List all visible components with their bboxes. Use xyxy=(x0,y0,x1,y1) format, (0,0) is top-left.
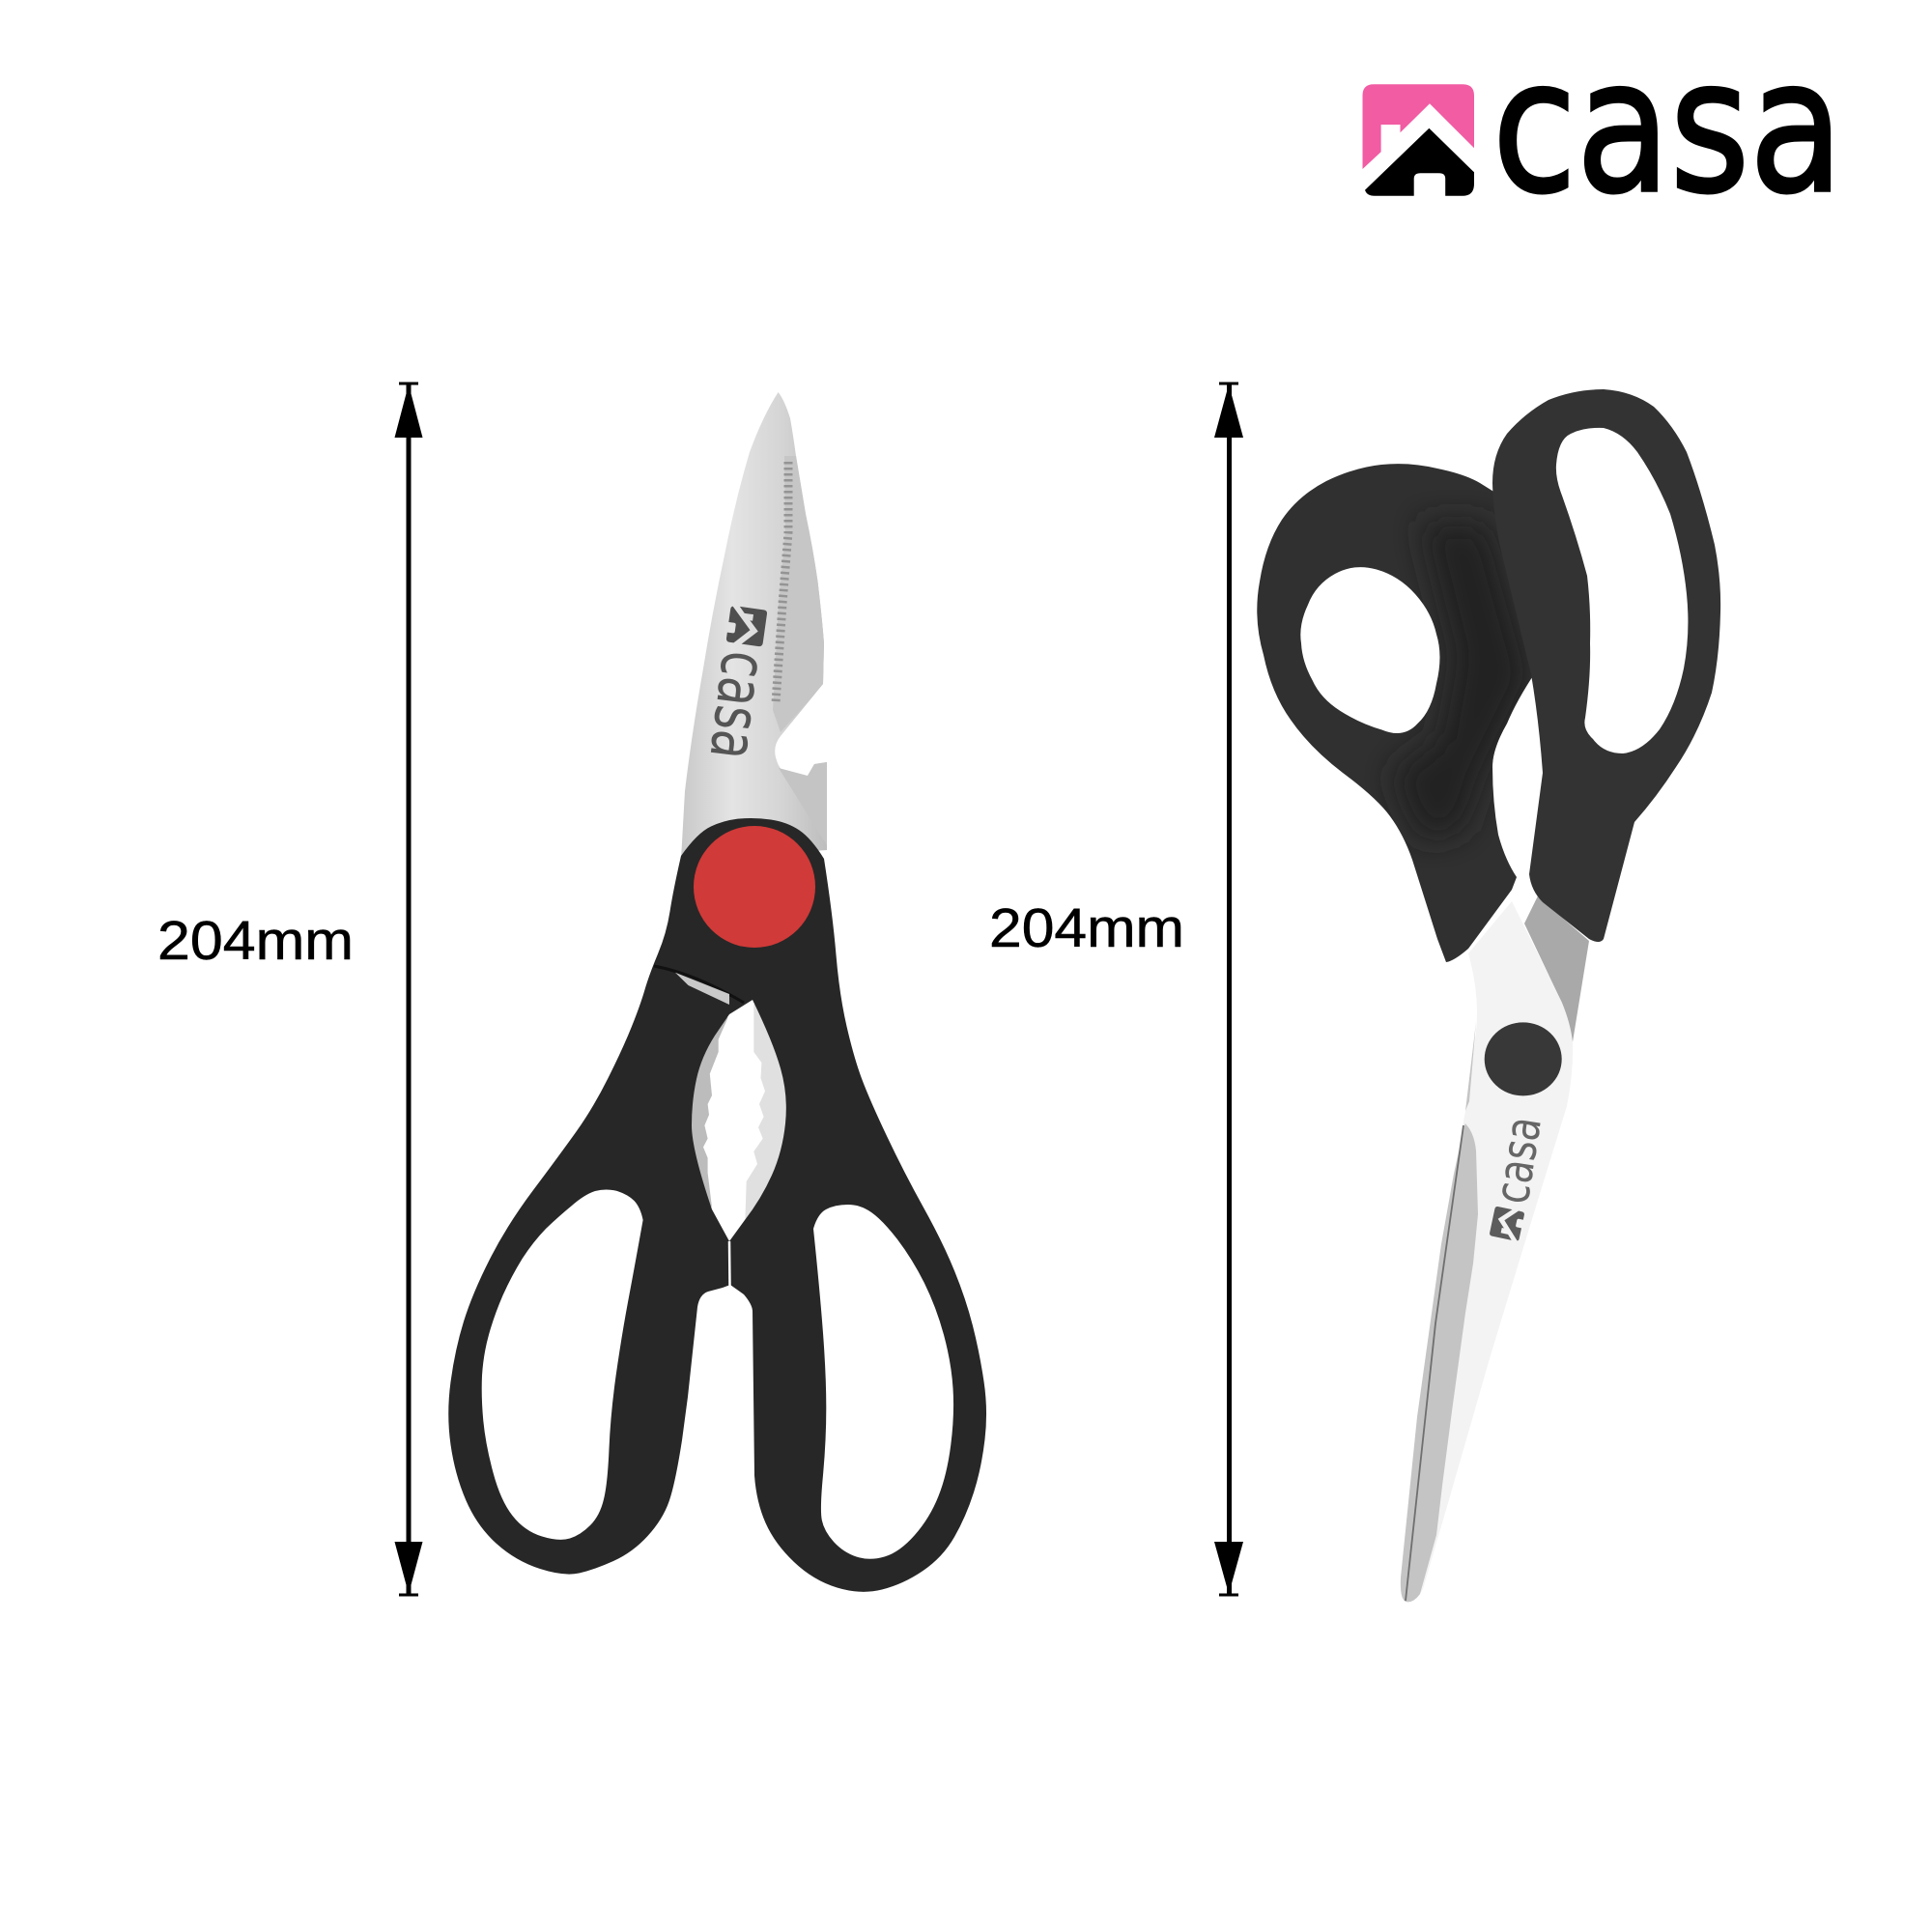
serrated edge xyxy=(773,456,824,732)
blade logo mark xyxy=(725,606,767,647)
lower tang xyxy=(779,762,827,845)
blade logo mark xyxy=(1490,1206,1524,1241)
jaw: left serrated blade xyxy=(676,1005,728,1208)
jaw: right serrated blade xyxy=(745,995,802,1219)
red pivot button xyxy=(694,826,815,948)
logo: casa xyxy=(1362,20,1843,234)
blade wordmark: casa xyxy=(1484,1113,1552,1208)
logo wordmark: casa xyxy=(1492,20,1843,234)
left grip xyxy=(1257,464,1536,962)
main blade xyxy=(1401,901,1573,1602)
seam on grip xyxy=(654,966,744,1003)
ground bevel xyxy=(1401,1022,1478,1602)
dimension label: right: 204mm xyxy=(989,897,1184,959)
dimension arrow: right scissors xyxy=(1214,383,1243,1596)
slit between handles xyxy=(728,1241,731,1286)
back blade stub xyxy=(1524,896,1589,1042)
dimension arrow: left scissors xyxy=(394,383,423,1596)
infographic canvas xyxy=(160,84,1832,1602)
shading on left grip xyxy=(1391,522,1531,840)
pivot screw xyxy=(1485,1022,1562,1095)
blade wordmark: casa xyxy=(695,647,782,764)
handles silhouette xyxy=(448,818,986,1592)
right scissors: household shears xyxy=(1257,389,1720,1602)
icon: black house xyxy=(1365,128,1474,196)
left scissors: kitchen shears xyxy=(448,392,986,1592)
upper blade xyxy=(681,392,827,860)
icon: pink house mark xyxy=(1362,84,1474,169)
silver latch xyxy=(675,973,729,1005)
dimension label: left: 204mm xyxy=(157,910,354,972)
right grip xyxy=(1492,389,1720,942)
bevel line xyxy=(1406,1125,1463,1601)
